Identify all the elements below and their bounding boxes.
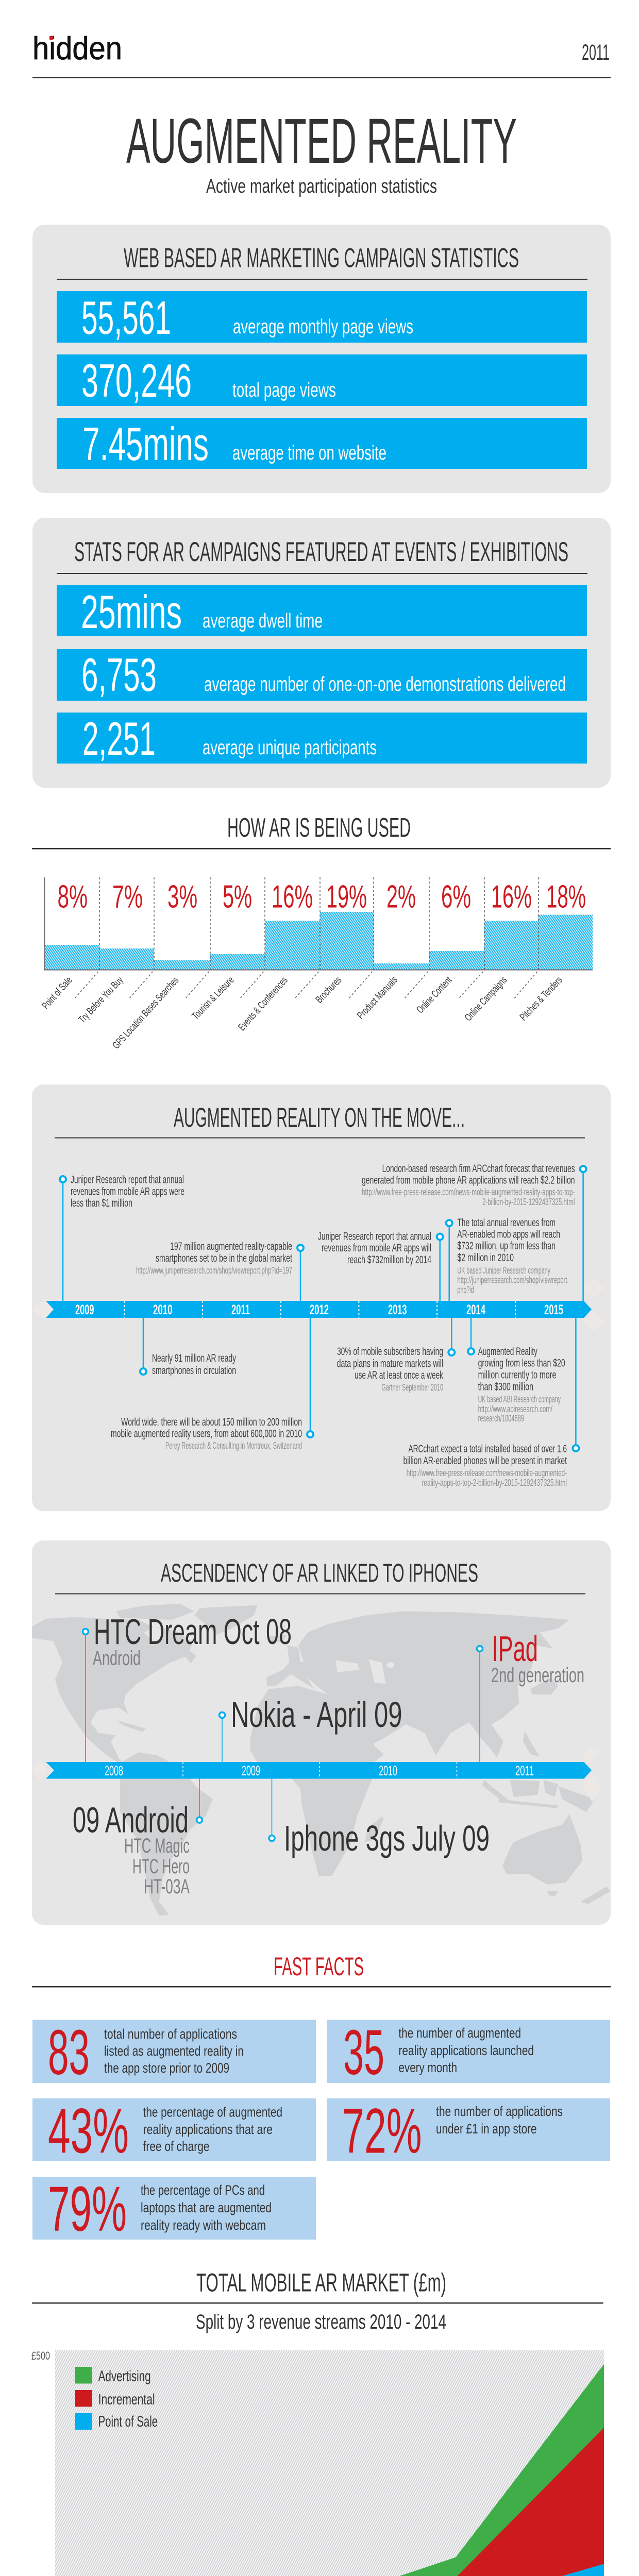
fact: 79% webcam: laptops that are augmented: [141, 2200, 272, 2215]
category labels: Pitches & Tenders: [518, 975, 565, 1023]
event: mobile AR apps less than $1 million: [60, 1174, 184, 1301]
percentages: [58, 879, 586, 915]
timeline bar 2008 to 2011: 2011: [515, 1763, 534, 1778]
category labels: GPS Location Bases Searches: [110, 975, 181, 1051]
category labels: Events & Conferences: [236, 975, 290, 1033]
stat: unique participants: average unique participants: [203, 737, 377, 759]
stat: monthly page views: 55,561: [81, 292, 171, 344]
event: Juniper $732 million by 2014: revenues from mobile AR apps will: [322, 1242, 431, 1254]
event: 30% of mobile subscribers: use AR at least once a week: [355, 1369, 443, 1381]
category labels: Try Before You Buy: [77, 974, 126, 1025]
event: total annual revenues: [446, 1217, 569, 1301]
event: 197 million smartphones: [136, 1241, 304, 1301]
logo: hidden: hidden: [32, 31, 122, 66]
stat: total page views: total page views: [232, 379, 336, 401]
event: HTC Dream: HTC Dream Oct 08: [94, 1612, 292, 1652]
event: growing to more than $300 million: million currently to more: [478, 1369, 557, 1381]
event: Juniper $732 million by 2014: [318, 1230, 443, 1301]
event: 30% of mobile subscribers: data plans in mature markets will: [337, 1358, 443, 1370]
panel: ascendency of AR linked to iPhones: [31, 1540, 611, 1925]
event: iPad: [477, 1629, 584, 1762]
fact: 79% webcam: reality ready with webcam: [141, 2217, 266, 2233]
stat: demonstrations: [57, 649, 587, 701]
fact: 79% webcam: [32, 2174, 316, 2245]
panel: augmented reality on the move timeline: [32, 1084, 611, 1511]
category labels: Brochures: [313, 975, 344, 1005]
percentages: 5%: [223, 879, 252, 915]
percentages: 19%: [326, 879, 367, 915]
stat: total page views: [57, 354, 587, 407]
event: ARCchart 1.6 billion phones: reality-apps-to-top-2-billion-by-2015-1292437325.html: [422, 1478, 567, 1488]
event: 150 to 200 million users: mobile augmented reality users, from about 600,000 in 2010: [111, 1428, 302, 1440]
fact: 35 per month: 35: [343, 2018, 384, 2088]
event: iPad: IPad: [492, 1629, 538, 1669]
header: [32, 31, 611, 78]
percentages: 3%: [167, 879, 197, 915]
timeline bar 2008 to 2011: 2008: [105, 1763, 123, 1778]
stat: demonstrations: 6,753: [81, 649, 157, 701]
timeline bar 2009 to 2015: 2009: [75, 1302, 94, 1317]
event: 197 million smartphones: smartphones set to be in the global market: [156, 1252, 292, 1264]
percentages: 18%: [546, 879, 586, 915]
event: 30% of mobile subscribers: Gartner September 2010: [381, 1382, 443, 1393]
fact: 35 per month: the number of augmented: [398, 2025, 521, 2041]
fact: 43% free of charge: free of charge: [143, 2139, 209, 2154]
subtitle: Active market participation statistics: [206, 176, 437, 197]
world map background: [31, 1604, 611, 1916]
event: 09 Android: HT-03A: [144, 1875, 190, 1898]
event: growing to more than $300 million: growing from less than $20: [478, 1358, 565, 1369]
event: 197 million smartphones: 197 million augmented reality-capable: [170, 1241, 292, 1252]
event: mobile AR apps less than $1 million: Juniper Research report that annual: [71, 1174, 184, 1186]
event: Nokia: [220, 1694, 402, 1762]
event: HTC Dream: Android: [93, 1647, 141, 1670]
timeline bar 2009 to 2015: 2012: [310, 1302, 329, 1317]
stat: unique participants: 2,251: [82, 713, 156, 765]
event: 150 to 200 million users: World wide, there will be about 150 million to 200 million: [121, 1416, 302, 1428]
fact: 79% webcam: 79%: [48, 2174, 127, 2245]
timeline bar 2008 to 2011: 2010: [379, 1763, 397, 1778]
fact: 35 per month: every month: [398, 2060, 457, 2075]
legend: Point of Sale: [98, 2413, 158, 2430]
fact: 72% under one pound: under £1 in app store: [436, 2121, 537, 2137]
event: ARCchart $2.2 billion forecast: 2-billion-by-2015-1292437325.html: [482, 1197, 575, 1207]
event: 30% of mobile subscribers: 30% of mobile subscribers having: [337, 1346, 443, 1358]
fact: 43% free of charge: reality applications that are: [143, 2122, 273, 2137]
event: Nokia: Nokia - April 09: [231, 1694, 402, 1735]
event: mobile AR apps less than $1 million: revenues from mobile AR apps were: [71, 1185, 184, 1197]
stat: dwell time: [57, 585, 587, 638]
stat: time on website: 7.45mins: [82, 418, 209, 470]
fact: 83 applications: total number of applications: [104, 2026, 237, 2042]
timeline bar 2008 to 2011: [46, 1762, 592, 1778]
event: 09 Android: [73, 1778, 202, 1898]
percentages: 16%: [272, 879, 313, 915]
panel: web based AR marketing statistics: [32, 225, 611, 493]
event: total annual revenues: php?id: [457, 1285, 474, 1295]
area chart: revenue streams: [31, 2349, 604, 2576]
event: growing to more than $300 million: research/1004689: [478, 1413, 524, 1423]
timeline bar 2009 to 2015: 2010: [153, 1302, 172, 1317]
axis labels: £500: [31, 2349, 50, 2362]
event: 150 to 200 million users: [111, 1318, 313, 1451]
stat: dwell time: 25mins: [81, 586, 182, 638]
legend: Advertising: [98, 2368, 151, 2385]
event: growing to more than $300 million: than $300 million: [478, 1381, 533, 1393]
event: total annual revenues: The total annual revenues from: [457, 1217, 556, 1229]
event: mobile AR apps less than $1 million: less than $1 million: [71, 1197, 132, 1209]
event: ARCchart 1.6 billion phones: [403, 1318, 579, 1488]
event: total annual revenues: $2 million in 2010: [457, 1252, 514, 1264]
stat: time on website: average time on website: [232, 442, 386, 464]
fact: 35 per month: reality applications launched: [398, 2043, 534, 2058]
fact: 43% free of charge: 43%: [48, 2096, 129, 2167]
event: total annual revenues: UK based Juniper Research company: [457, 1265, 550, 1276]
category labels: Point of Sale: [40, 975, 74, 1011]
category labels: [40, 974, 565, 1051]
category labels: Online Content: [414, 974, 455, 1015]
event: 30% of mobile subscribers: [337, 1318, 455, 1393]
event: growing to more than $300 million: http://www.abiresearch.com/: [478, 1404, 552, 1414]
bar chart: how AR is being used: [40, 877, 593, 1051]
timeline bar 2009 to 2015: 2014: [466, 1302, 485, 1317]
stat: unique participants: [57, 713, 587, 765]
legend: Incremental: [98, 2391, 155, 2408]
stat: dwell time: average dwell time: [203, 610, 323, 632]
event: 91 million smartphones: [140, 1318, 236, 1377]
event: 09 Android: HTC Magic: [124, 1835, 190, 1857]
fact: 79% webcam: the percentage of PCs and: [141, 2182, 265, 2198]
event: iPhone 3gs: Iphone 3gs July 09: [284, 1818, 490, 1858]
category labels: Product Manuals: [355, 974, 400, 1021]
year: 2011: [582, 40, 610, 65]
timeline bar 2009 to 2015: 2015: [544, 1302, 563, 1317]
fact: 83 applications: 83: [48, 2018, 90, 2088]
event: total annual revenues: $732 million, up from less than: [457, 1240, 556, 1252]
event: Juniper $732 million by 2014: Juniper Research report that annual: [318, 1230, 431, 1243]
category labels: Online Campaigns: [463, 974, 509, 1023]
subheading: Split by 3 revenue streams 2010 - 2014: [196, 2311, 446, 2333]
legend: [75, 2367, 158, 2430]
event: 09 Android: 09 Android: [73, 1800, 189, 1840]
event: total annual revenues: http://juniperresearch.com/shop/viewreport.: [457, 1275, 569, 1285]
event: 197 million smartphones: http://www.juniperresearch.com/shop/viewreport.php?id=197: [136, 1265, 292, 1276]
heading: how AR is being used: HOW AR IS BEING USED: [227, 813, 411, 843]
timeline bar 2008 to 2011: 2009: [242, 1763, 260, 1778]
heading: total mobile AR market: TOTAL MOBILE AR MARKET (£m): [196, 2268, 446, 2297]
panel: stats for events and exhibitions: [32, 518, 611, 788]
fact: 35 per month: [327, 2018, 610, 2088]
event: growing to more than $300 million: UK based ABI Research company: [478, 1394, 561, 1404]
fact: 72% under one pound: [327, 2096, 610, 2167]
stat: monthly page views: average monthly page views: [233, 316, 413, 338]
timeline bar 2009 to 2015: 2013: [388, 1302, 407, 1317]
fact: 83 applications: the app store prior to 2009: [104, 2060, 229, 2076]
percentages: 2%: [386, 879, 416, 915]
fact: 83 applications: listed as augmented reality in: [104, 2043, 244, 2059]
fact: 72% under one pound: 72%: [342, 2096, 422, 2167]
event: 09 Android: HTC Hero: [132, 1855, 190, 1878]
event: HTC Dream: [82, 1612, 292, 1762]
fact: 83 applications: [32, 2018, 316, 2088]
event: iPad: 2nd generation: [491, 1664, 584, 1687]
event: growing to more than $300 million: Augmented Reality: [478, 1346, 537, 1358]
event: Juniper $732 million by 2014: reach $732million by 2014: [347, 1254, 431, 1266]
percentages: 8%: [58, 879, 88, 915]
event: 91 million smartphones: Nearly 91 million AR ready: [152, 1352, 236, 1364]
stat: total page views: 370,246: [81, 355, 192, 407]
event: 91 million smartphones: smartphones in circulation: [152, 1365, 236, 1377]
event: 150 to 200 million users: Perey Research & Consulting in Montreux, Switzerland: [165, 1440, 302, 1451]
heading: fast facts: FAST FACTS: [274, 1952, 364, 1981]
percentages: 7%: [112, 879, 143, 915]
stat: time on website: [57, 418, 587, 470]
percentages: 16%: [491, 879, 532, 915]
fact: 72% under one pound: the number of applications: [436, 2104, 563, 2119]
event: total annual revenues: AR-enabled mob apps will reach: [457, 1228, 560, 1241]
fact: 43% free of charge: the percentage of augmented: [143, 2104, 282, 2120]
timeline bar 2009 to 2015: 2011: [231, 1302, 250, 1317]
fact: 43% free of charge: [32, 2096, 316, 2167]
event: growing to more than $300 million: [468, 1318, 565, 1423]
event: iPhone 3gs: [269, 1778, 490, 1858]
event: ARCchart $2.2 billion forecast: [362, 1163, 586, 1301]
timeline bar 2009 to 2015: [46, 1301, 592, 1318]
stat: monthly page views: [57, 291, 587, 344]
category labels: Tourisn & Leisure: [190, 974, 237, 1022]
percentages: 6%: [441, 879, 471, 915]
